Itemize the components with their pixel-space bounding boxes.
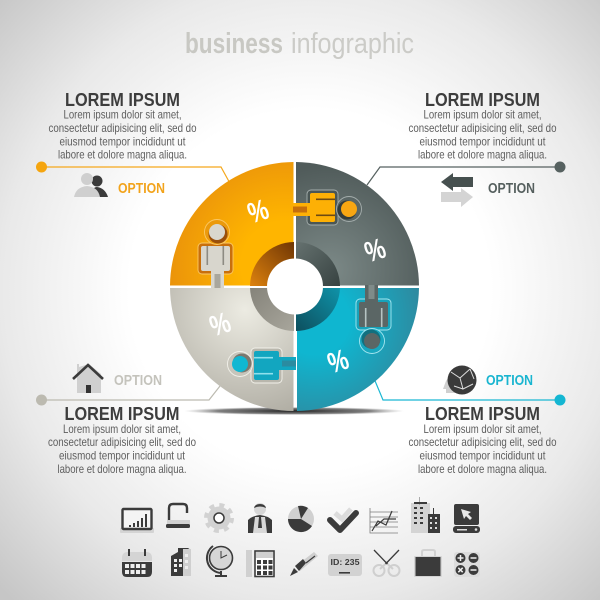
panel: top right text [408,89,557,162]
panel: top left text: eiusmod tempor incididunt ut [60,134,186,148]
icon: buildings [411,497,440,533]
icon: pen [290,552,318,576]
panel: bottom right text: eiusmod tempor incididunt ut [420,448,546,462]
icon: users [74,173,108,197]
icon: check mark [330,509,356,530]
icon: padlock [166,504,190,528]
icon: id badge [328,554,362,576]
panel: bottom left text: consectetur adipisicing elit, sed do [48,435,196,449]
ring: orange [250,242,294,286]
panel: teal piece [297,288,419,411]
icon: calculator [246,550,274,577]
icon: math symbols [454,552,480,577]
option label: dark: OPTION [488,181,535,197]
icon: calendar [122,549,152,577]
panel: bottom left text [48,403,196,476]
puzzle tab: orange person [293,190,362,225]
icon: globe clock [207,546,232,577]
icon: arrows [441,173,473,207]
icon: scissors [374,550,400,576]
chart shadow [184,407,404,415]
percent: dark: % [361,233,390,269]
panel: top left text [48,89,197,162]
panel: bottom right text: labore et dolore magna aliqua. [418,462,547,476]
percent: teal: % [324,344,353,380]
panel: top left text: consectetur adipisicing elit, sed do [48,121,197,135]
callout line: teal [373,376,566,406]
icon: monitor chart [120,509,154,533]
panel: bottom left text: eiusmod tempor incididunt ut [59,448,186,462]
panel: bottom right text [408,403,557,476]
icon: gear [206,505,232,531]
icon: pie chart [288,506,314,532]
title [185,28,414,60]
title: business [185,28,283,60]
percent: orange: % [244,194,273,230]
ring: beige [250,288,294,331]
panel: bottom right text: consectetur adipisicing elit, sed do [408,435,557,449]
ring: teal [296,288,340,331]
center hole [267,258,323,314]
panel: top right text: consectetur adipisicing elit, sed do [408,121,557,135]
icon: head with network [443,366,476,394]
panel: orange piece [170,162,294,286]
panel: top left text: LOREM IPSUM [65,89,180,110]
panel: top right text: labore et dolore magna aliqua. [418,148,547,162]
icon: id badge: ID: 235 [330,557,360,567]
icon: briefcase [414,550,442,577]
ring: dark [296,242,340,286]
panel: top right text: LOREM IPSUM [425,89,540,110]
panel: top left text: labore et dolore magna aliqua. [58,148,187,162]
panel: bottom left text: Lorem ipsum dolor sit amet, [63,422,181,436]
panel: top right text: Lorem ipsum dolor sit amet, [424,108,542,122]
panel: bottom right text: LOREM IPSUM [425,403,540,424]
icon: line chart [370,508,398,533]
icon: businessman [248,503,272,533]
panel: top right text: eiusmod tempor incididunt ut [420,134,546,148]
percent: beige: % [206,307,235,343]
title: infographic [291,28,414,60]
callout line: dark [367,162,566,185]
callout line: orange [36,162,232,187]
puzzle tab: dark person [356,285,391,354]
panel: bottom right text: Lorem ipsum dolor sit amet, [424,422,542,436]
puzzle tab: teal person [228,348,296,383]
option label: teal: OPTION [486,373,533,389]
option label: orange: OPTION [118,181,165,197]
puzzle chart [170,162,419,411]
panel: bottom left text: LOREM IPSUM [64,403,180,424]
icon: computer cursor [453,504,480,533]
panel: dark piece [296,162,419,286]
puzzle tab: beige person [198,220,233,288]
panel: beige piece [170,288,294,411]
panel: top left text: Lorem ipsum dolor sit amet, [64,108,182,122]
option label: beige: OPTION [114,373,162,389]
icon: office building [171,548,191,576]
icon: house [73,364,103,393]
panel: bottom left text: labore et dolore magna aliqua. [58,462,186,476]
callout line: beige [36,386,220,406]
